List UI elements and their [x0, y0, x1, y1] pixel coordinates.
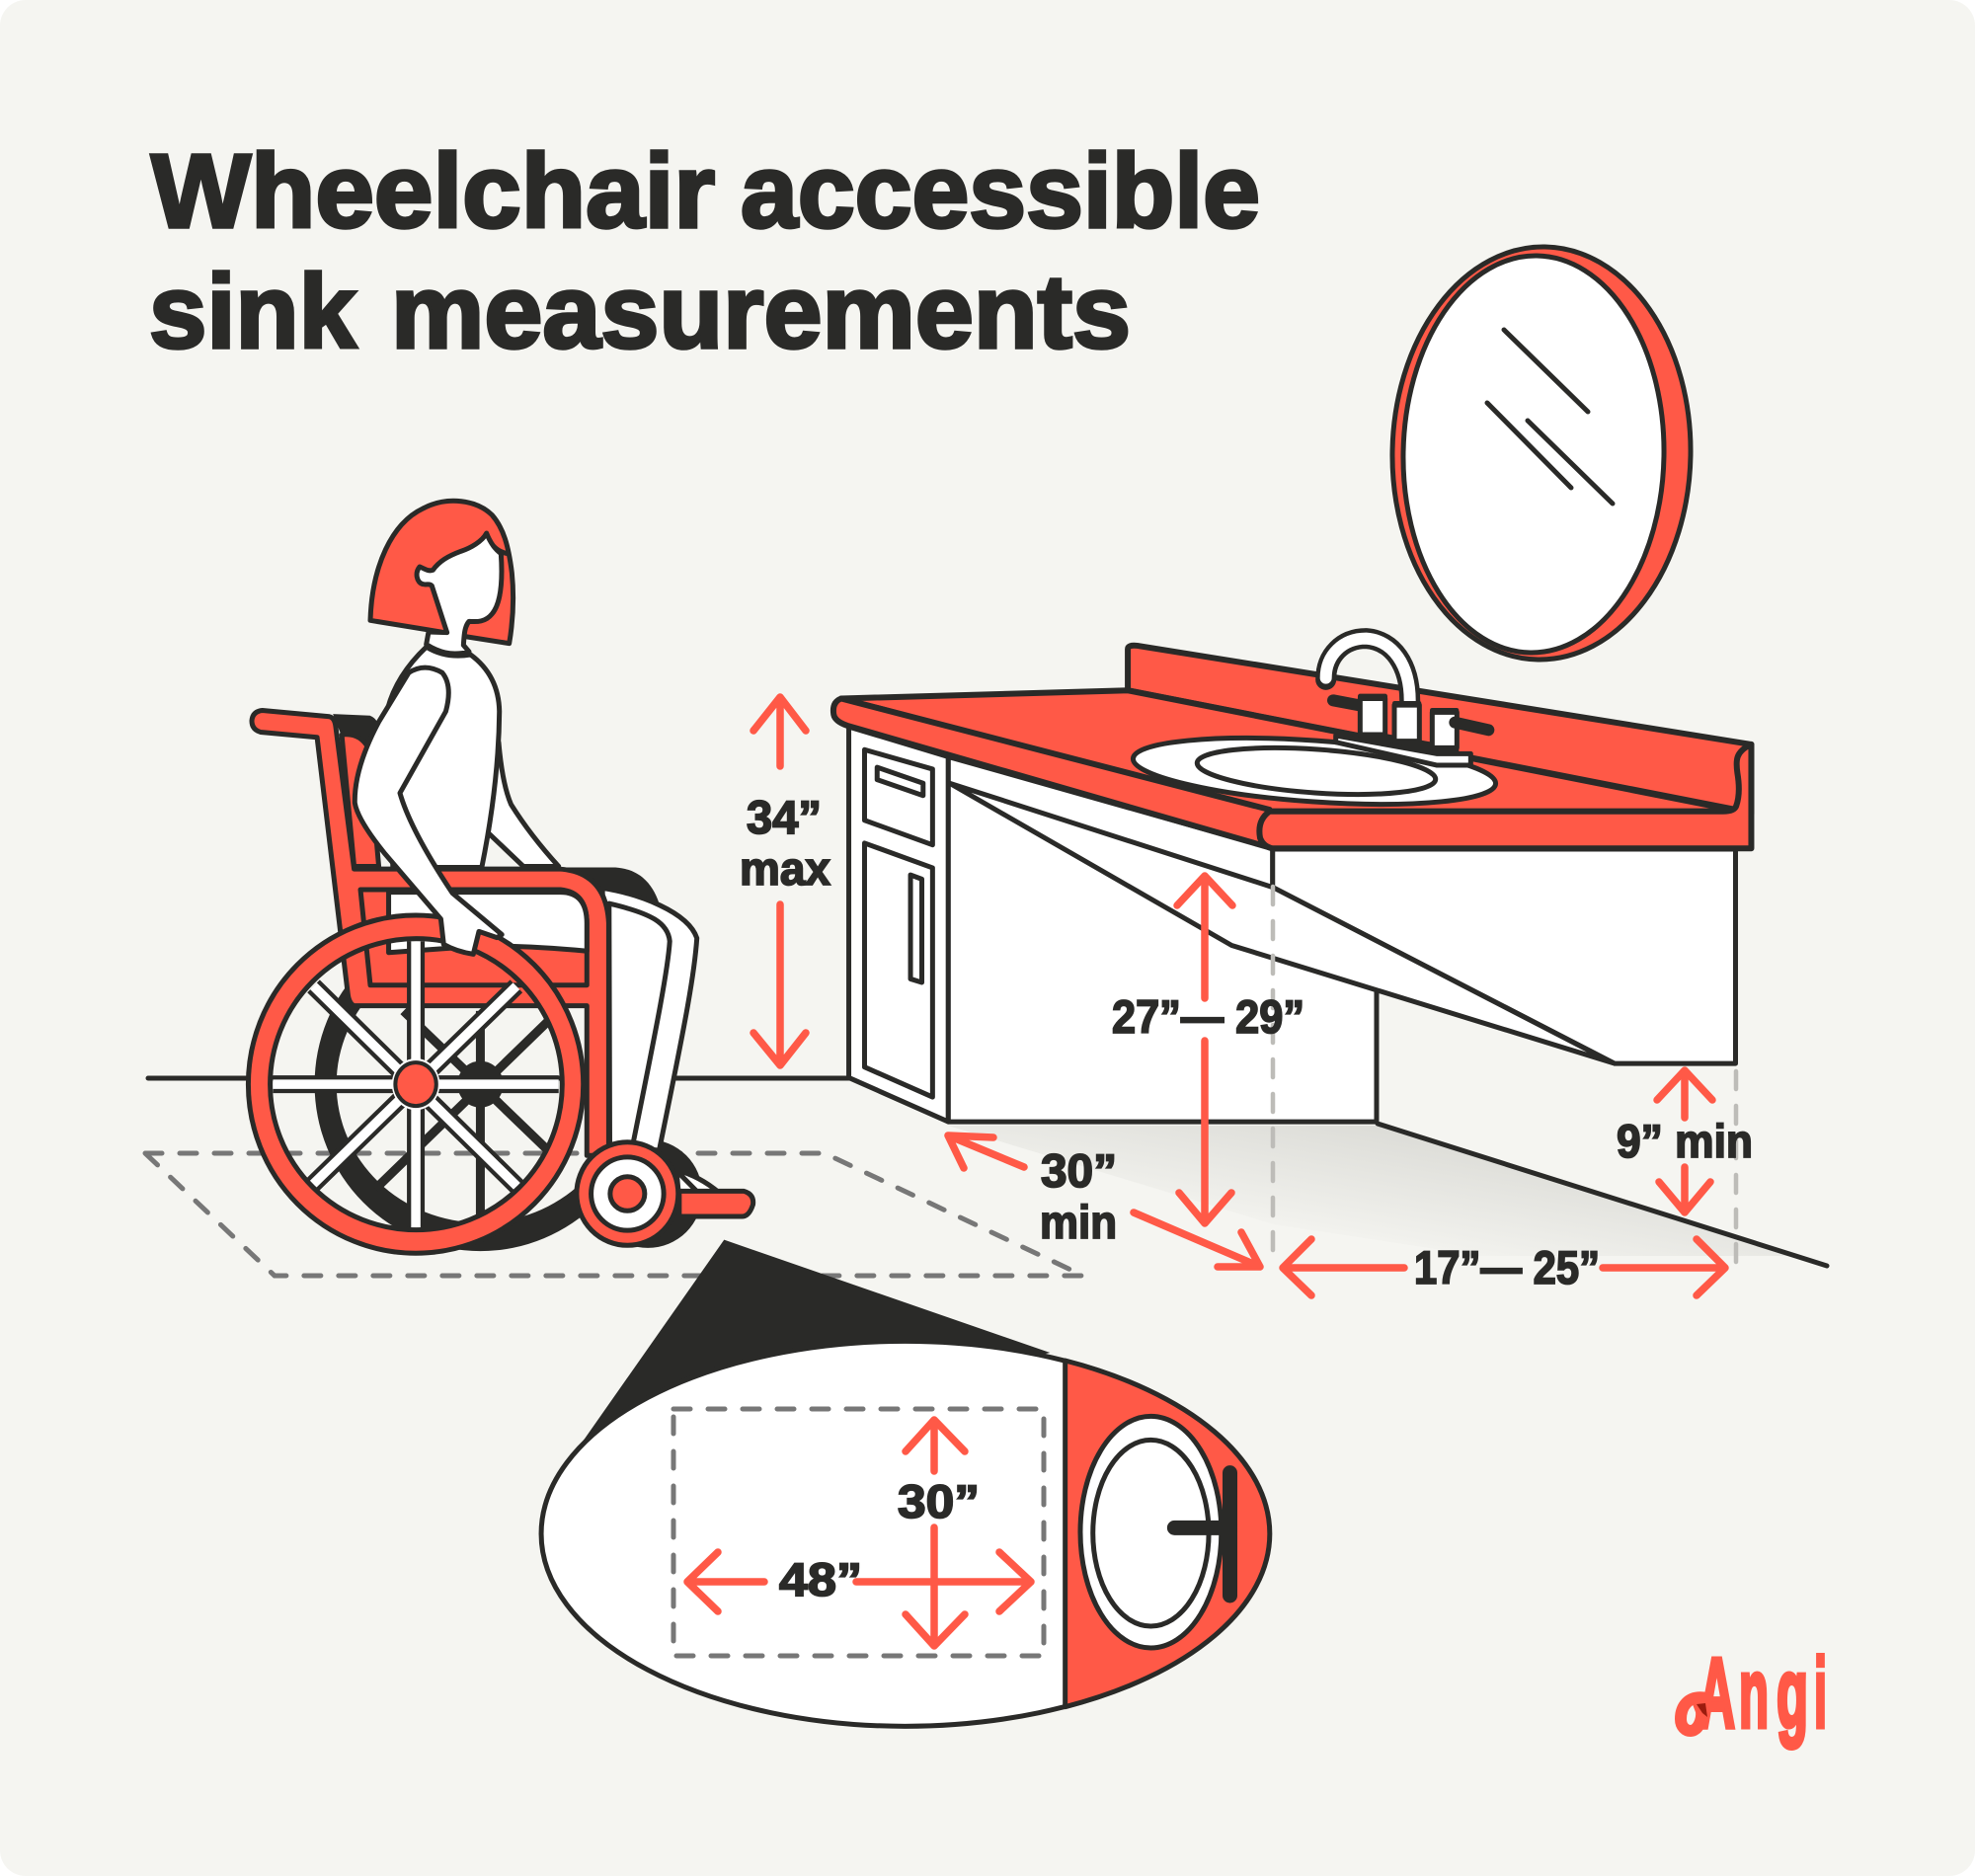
dashed manoeuvring rectangle	[673, 1409, 1044, 1656]
vanity	[833, 646, 1751, 1122]
label: 30 min: min	[1040, 1196, 1117, 1248]
counter front edge and lip	[1259, 744, 1751, 848]
sink outer	[1080, 1416, 1222, 1648]
label: 30 min: 30”	[1041, 1144, 1117, 1197]
right tap cap	[1430, 708, 1459, 715]
left handle bar	[1333, 700, 1363, 706]
counter left edge	[833, 698, 1273, 848]
far foot	[676, 1170, 719, 1193]
title: accessible	[741, 133, 1260, 250]
arrow: 48 left	[687, 1552, 764, 1611]
arrow: 30 down	[906, 1527, 965, 1646]
center tap cap	[1392, 701, 1421, 708]
arrow: 34 inch down	[753, 904, 806, 1065]
face and neck	[417, 533, 502, 654]
counter top	[841, 690, 1726, 812]
seat panel	[360, 890, 587, 985]
logo: Angi: g	[1777, 1638, 1808, 1749]
label: 34 max: max	[740, 842, 830, 895]
arrow: 9 up	[1657, 1070, 1712, 1118]
front wheel hub	[392, 1058, 439, 1110]
head and hair	[370, 501, 514, 654]
backrest cushion	[333, 714, 379, 763]
black seat back	[566, 867, 659, 903]
angled knee clearance	[950, 783, 1613, 1062]
caster wheel	[577, 1142, 678, 1245]
arrow: 27-29 down	[1179, 1041, 1231, 1223]
center tap	[1394, 705, 1419, 742]
torso	[387, 647, 500, 867]
label: 17-25: 17”— 25”	[1414, 1241, 1600, 1293]
rear wheel	[315, 917, 646, 1251]
title: Wheelchair	[151, 133, 715, 250]
title: sink	[149, 254, 357, 370]
label: 30: 30”	[898, 1475, 980, 1527]
faucet	[1326, 639, 1488, 765]
title	[149, 133, 1260, 370]
floor line	[148, 1076, 849, 1080]
arrow: 17-25 left	[1283, 1239, 1404, 1295]
right apron	[1273, 849, 1736, 1063]
drawer	[864, 749, 932, 845]
near leg	[609, 903, 670, 1145]
far arm	[488, 743, 559, 866]
sink inner	[1093, 1440, 1209, 1626]
floor shadow under vanity	[948, 1126, 1789, 1256]
door	[864, 843, 932, 1097]
cabinet front	[948, 756, 1377, 1122]
arrow: 48 right	[856, 1552, 1031, 1611]
left tap cap	[1358, 694, 1387, 701]
arrow: 34 inch up	[753, 697, 806, 766]
logo: Angi: n	[1739, 1638, 1769, 1749]
logo: Angi	[1681, 1638, 1827, 1749]
near arm	[355, 667, 502, 954]
chair frame	[252, 711, 608, 1155]
label: 27-29: 27”— 29”	[1112, 990, 1304, 1043]
right handle bar	[1455, 723, 1488, 730]
cabinet side	[849, 727, 948, 1122]
sink basin	[1131, 728, 1498, 815]
drawer handle	[877, 767, 923, 796]
arrow: 27-29 up	[1177, 876, 1232, 998]
text: i	[1814, 1638, 1827, 1749]
guide dashes	[1273, 887, 1736, 1267]
arrow: 17-25 right	[1603, 1239, 1725, 1295]
backrest panel	[342, 735, 379, 866]
base plate	[1336, 736, 1470, 765]
faucet top	[1174, 1473, 1230, 1596]
left tap	[1360, 698, 1385, 735]
label: 34 max	[740, 791, 830, 895]
logo: Angi: A	[1698, 1638, 1735, 1749]
arrow: 30 up	[906, 1420, 965, 1471]
chair seat cushion bump	[609, 954, 620, 1000]
wall floor line	[1378, 1124, 1827, 1266]
door handle	[910, 875, 922, 982]
illustration: wheelchair and body	[248, 647, 753, 1253]
dashed clear floor space	[145, 1153, 1083, 1276]
hair strand	[494, 546, 508, 554]
spout	[1326, 639, 1410, 703]
label: 9 min: 9” min	[1617, 1115, 1753, 1167]
detail view: top down	[541, 1240, 1270, 1726]
title: measurements	[391, 254, 1131, 370]
hair	[370, 501, 514, 644]
label: 48: 48”	[779, 1553, 862, 1605]
red counter	[1066, 1361, 1270, 1707]
thigh	[389, 893, 587, 953]
mirror	[1388, 244, 1695, 663]
arrow: 30 min top	[948, 1135, 1024, 1168]
front wheel ring	[248, 915, 584, 1253]
plate shadow	[1360, 729, 1459, 757]
label: 30 min	[1040, 1144, 1117, 1248]
backsplash	[1128, 646, 1751, 814]
caster back wheel	[593, 1139, 702, 1248]
far leg	[602, 888, 697, 1150]
black pointer	[570, 1240, 1050, 1459]
right tap	[1432, 712, 1457, 747]
footrest	[679, 1191, 753, 1216]
spokes outline	[273, 941, 559, 1228]
label: 34 max: 34”	[747, 791, 822, 843]
arrow: 9 down	[1659, 1167, 1710, 1212]
arrow: 30 min bottom	[1134, 1212, 1260, 1267]
white ellipse	[541, 1341, 1269, 1726]
